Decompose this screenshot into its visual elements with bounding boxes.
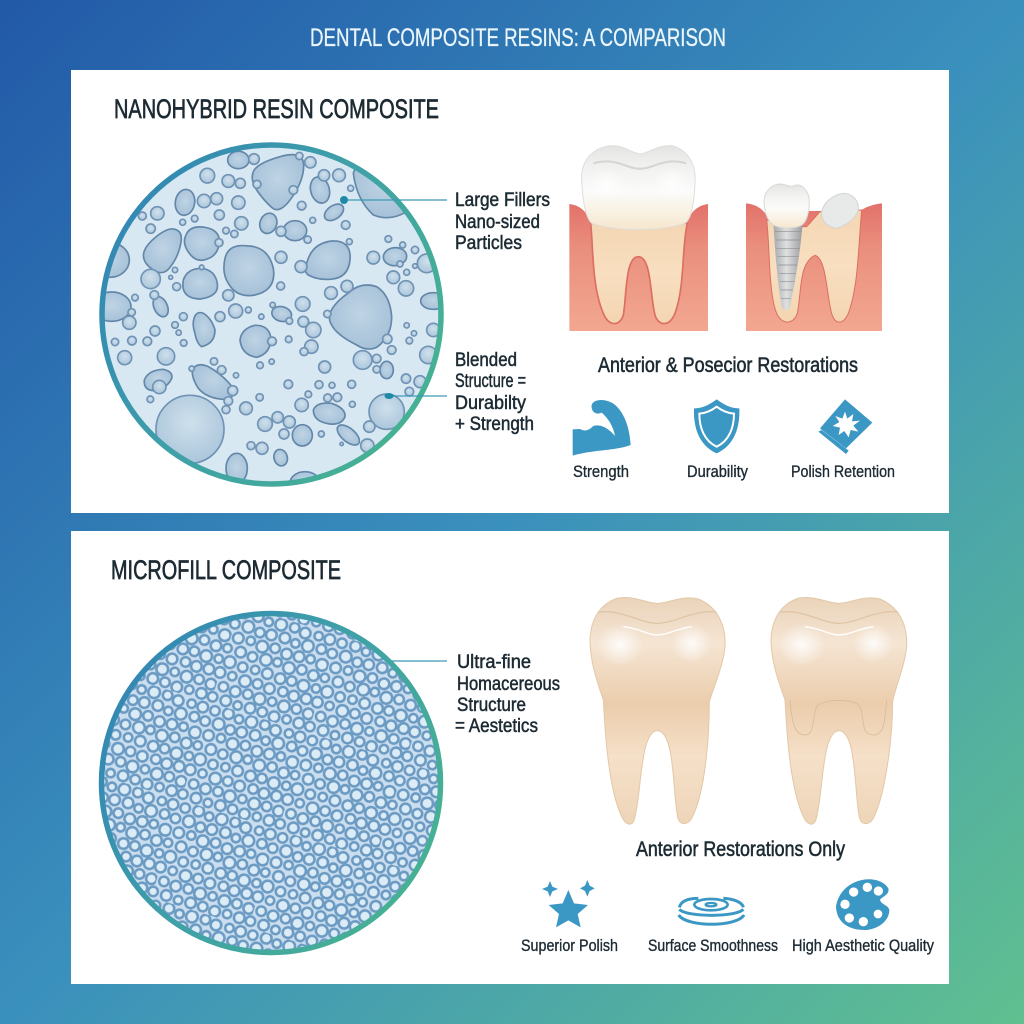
label: blended structure bbox=[455, 350, 534, 435]
leader: blended structure bbox=[384, 393, 447, 399]
title: DENTAL COMPOSITE RESINS: A COMPARISON bbox=[310, 24, 726, 52]
icon: strength arm bbox=[573, 400, 631, 456]
label: large fillers: Particles bbox=[455, 233, 522, 254]
label: blended structure: Structure = bbox=[455, 371, 526, 392]
icon: palette bbox=[836, 879, 889, 930]
label: polish retention: Polish Retention bbox=[791, 463, 895, 481]
label: large fillers bbox=[455, 190, 550, 254]
label: blended structure: + Strength bbox=[455, 414, 534, 435]
label: surface smoothness: Surface Smoothness bbox=[648, 937, 778, 955]
label: ultra-fine structure: Homacereous bbox=[457, 674, 560, 695]
label: superior polish: Superior Polish bbox=[521, 937, 618, 955]
caption: anterior and posterior: Anterior & Posecior Restorations bbox=[598, 354, 858, 377]
label: strength: Strength bbox=[573, 463, 629, 481]
label: ultra-fine structure: Structure bbox=[457, 695, 526, 716]
icon: polish retention book bbox=[818, 399, 872, 454]
illustration: implant and restored tooth bbox=[746, 184, 882, 331]
illustration: composite crown on tooth in gum bbox=[569, 146, 708, 331]
label: ultra-fine structure: Ultra-fine bbox=[457, 652, 531, 673]
heading: microfill: MICROFILL COMPOSITE bbox=[111, 555, 341, 585]
heading: nanohybrid: NANOHYBRID RESIN COMPOSITE bbox=[114, 94, 439, 124]
label: ultra-fine structure bbox=[455, 652, 560, 737]
icon: surface smoothness rings bbox=[679, 898, 744, 924]
label: ultra-fine structure: = Aestetics bbox=[455, 716, 538, 737]
icon: durability shield bbox=[694, 399, 739, 453]
micrograph: large fillers and nano-sized particles bbox=[91, 144, 446, 495]
illustration: microfill tooth right bbox=[771, 598, 907, 824]
label: blended structure: Blended bbox=[455, 350, 517, 371]
icon: superior polish stars bbox=[542, 880, 595, 927]
label: high aesthetic quality: High Aesthetic Quality bbox=[792, 937, 935, 955]
micrograph: ultra-fine particles bbox=[101, 613, 441, 953]
panel: nanohybrid resin composite bbox=[71, 70, 949, 513]
label: durability: Durability bbox=[687, 463, 749, 481]
gradient ring bbox=[102, 145, 441, 484]
label: large fillers: Nano-sized bbox=[455, 212, 540, 233]
label: large fillers: Large Fillers bbox=[455, 190, 550, 211]
panel: microfill composite bbox=[71, 531, 949, 984]
leader: large fillers bbox=[340, 196, 447, 204]
illustration: microfill tooth left bbox=[590, 598, 725, 824]
caption: anterior only: Anterior Restorations Only bbox=[636, 838, 845, 861]
label: blended structure: Durabilty bbox=[455, 393, 526, 414]
gradient ring bbox=[102, 614, 440, 952]
leader: ultra-fine bbox=[392, 660, 447, 662]
